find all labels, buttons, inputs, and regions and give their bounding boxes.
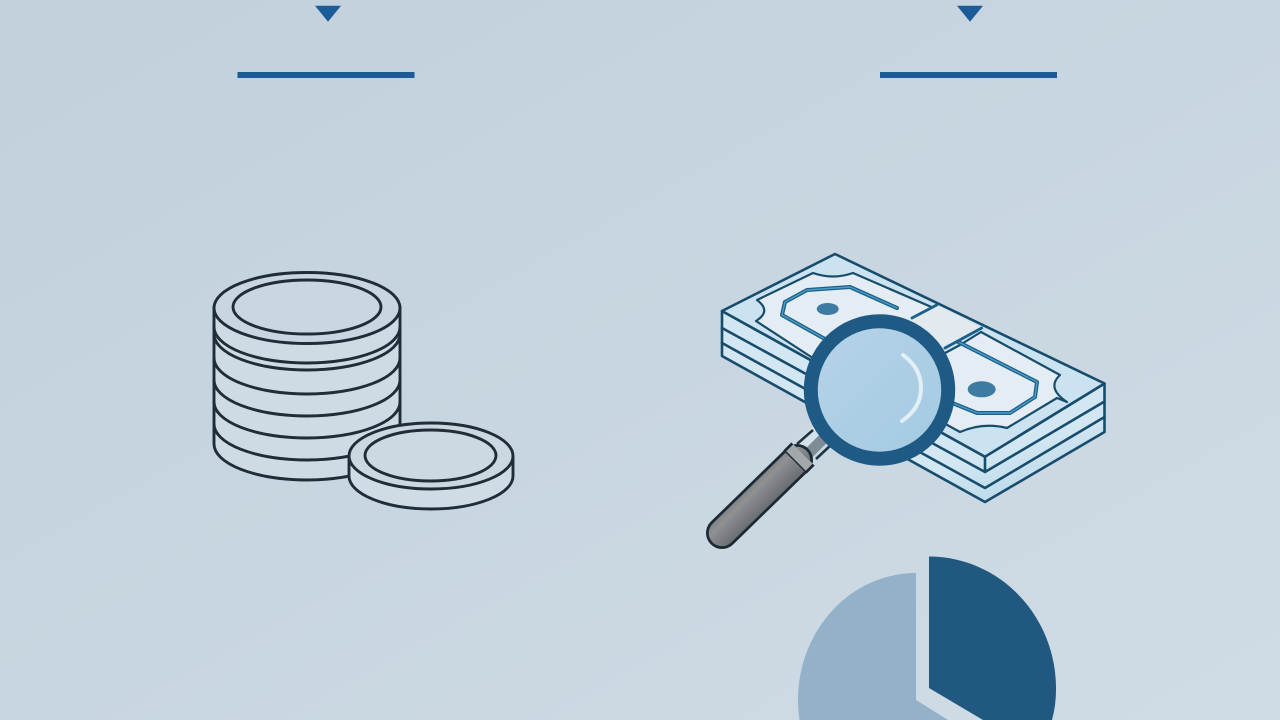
left rule: [238, 72, 414, 78]
band edges: [912, 305, 982, 348]
icon: coin stack: [214, 272, 513, 509]
top coin inner ring: [233, 280, 381, 334]
chart: pie: [798, 556, 1056, 720]
pie slice: light: [798, 573, 948, 720]
right rule: [880, 72, 1057, 78]
neck: [797, 430, 832, 459]
marker: right triangle and rule: [880, 6, 1057, 78]
center band: [825, 305, 982, 388]
collar: [795, 454, 803, 462]
marker: left triangle and rule: [238, 6, 414, 78]
loose coin edge: [349, 457, 513, 509]
stack coin edges: [214, 327, 400, 460]
stack body: [214, 307, 400, 480]
loose coin inner ring: [365, 430, 496, 481]
right inner border: [925, 325, 1037, 413]
handle: [722, 460, 797, 533]
right note panel: [880, 332, 1067, 432]
lens ring: [811, 321, 948, 459]
note stack sides: [722, 311, 1104, 502]
lens highlight: [902, 355, 921, 421]
icon: banknote stack: [722, 254, 1104, 502]
icon: right triangle: [957, 6, 983, 22]
pie slice: dark: [929, 556, 1056, 720]
note layer lines: [722, 328, 1104, 488]
left note panel: [756, 273, 936, 364]
top note face: [722, 254, 1104, 457]
loose coin face: [349, 423, 513, 489]
icon: left triangle: [315, 6, 341, 22]
left inner border: [782, 287, 897, 353]
top coin face: [214, 272, 400, 344]
left note seal: [817, 303, 839, 315]
right note seal: [968, 381, 996, 397]
icon: magnifying glass: [722, 321, 948, 533]
